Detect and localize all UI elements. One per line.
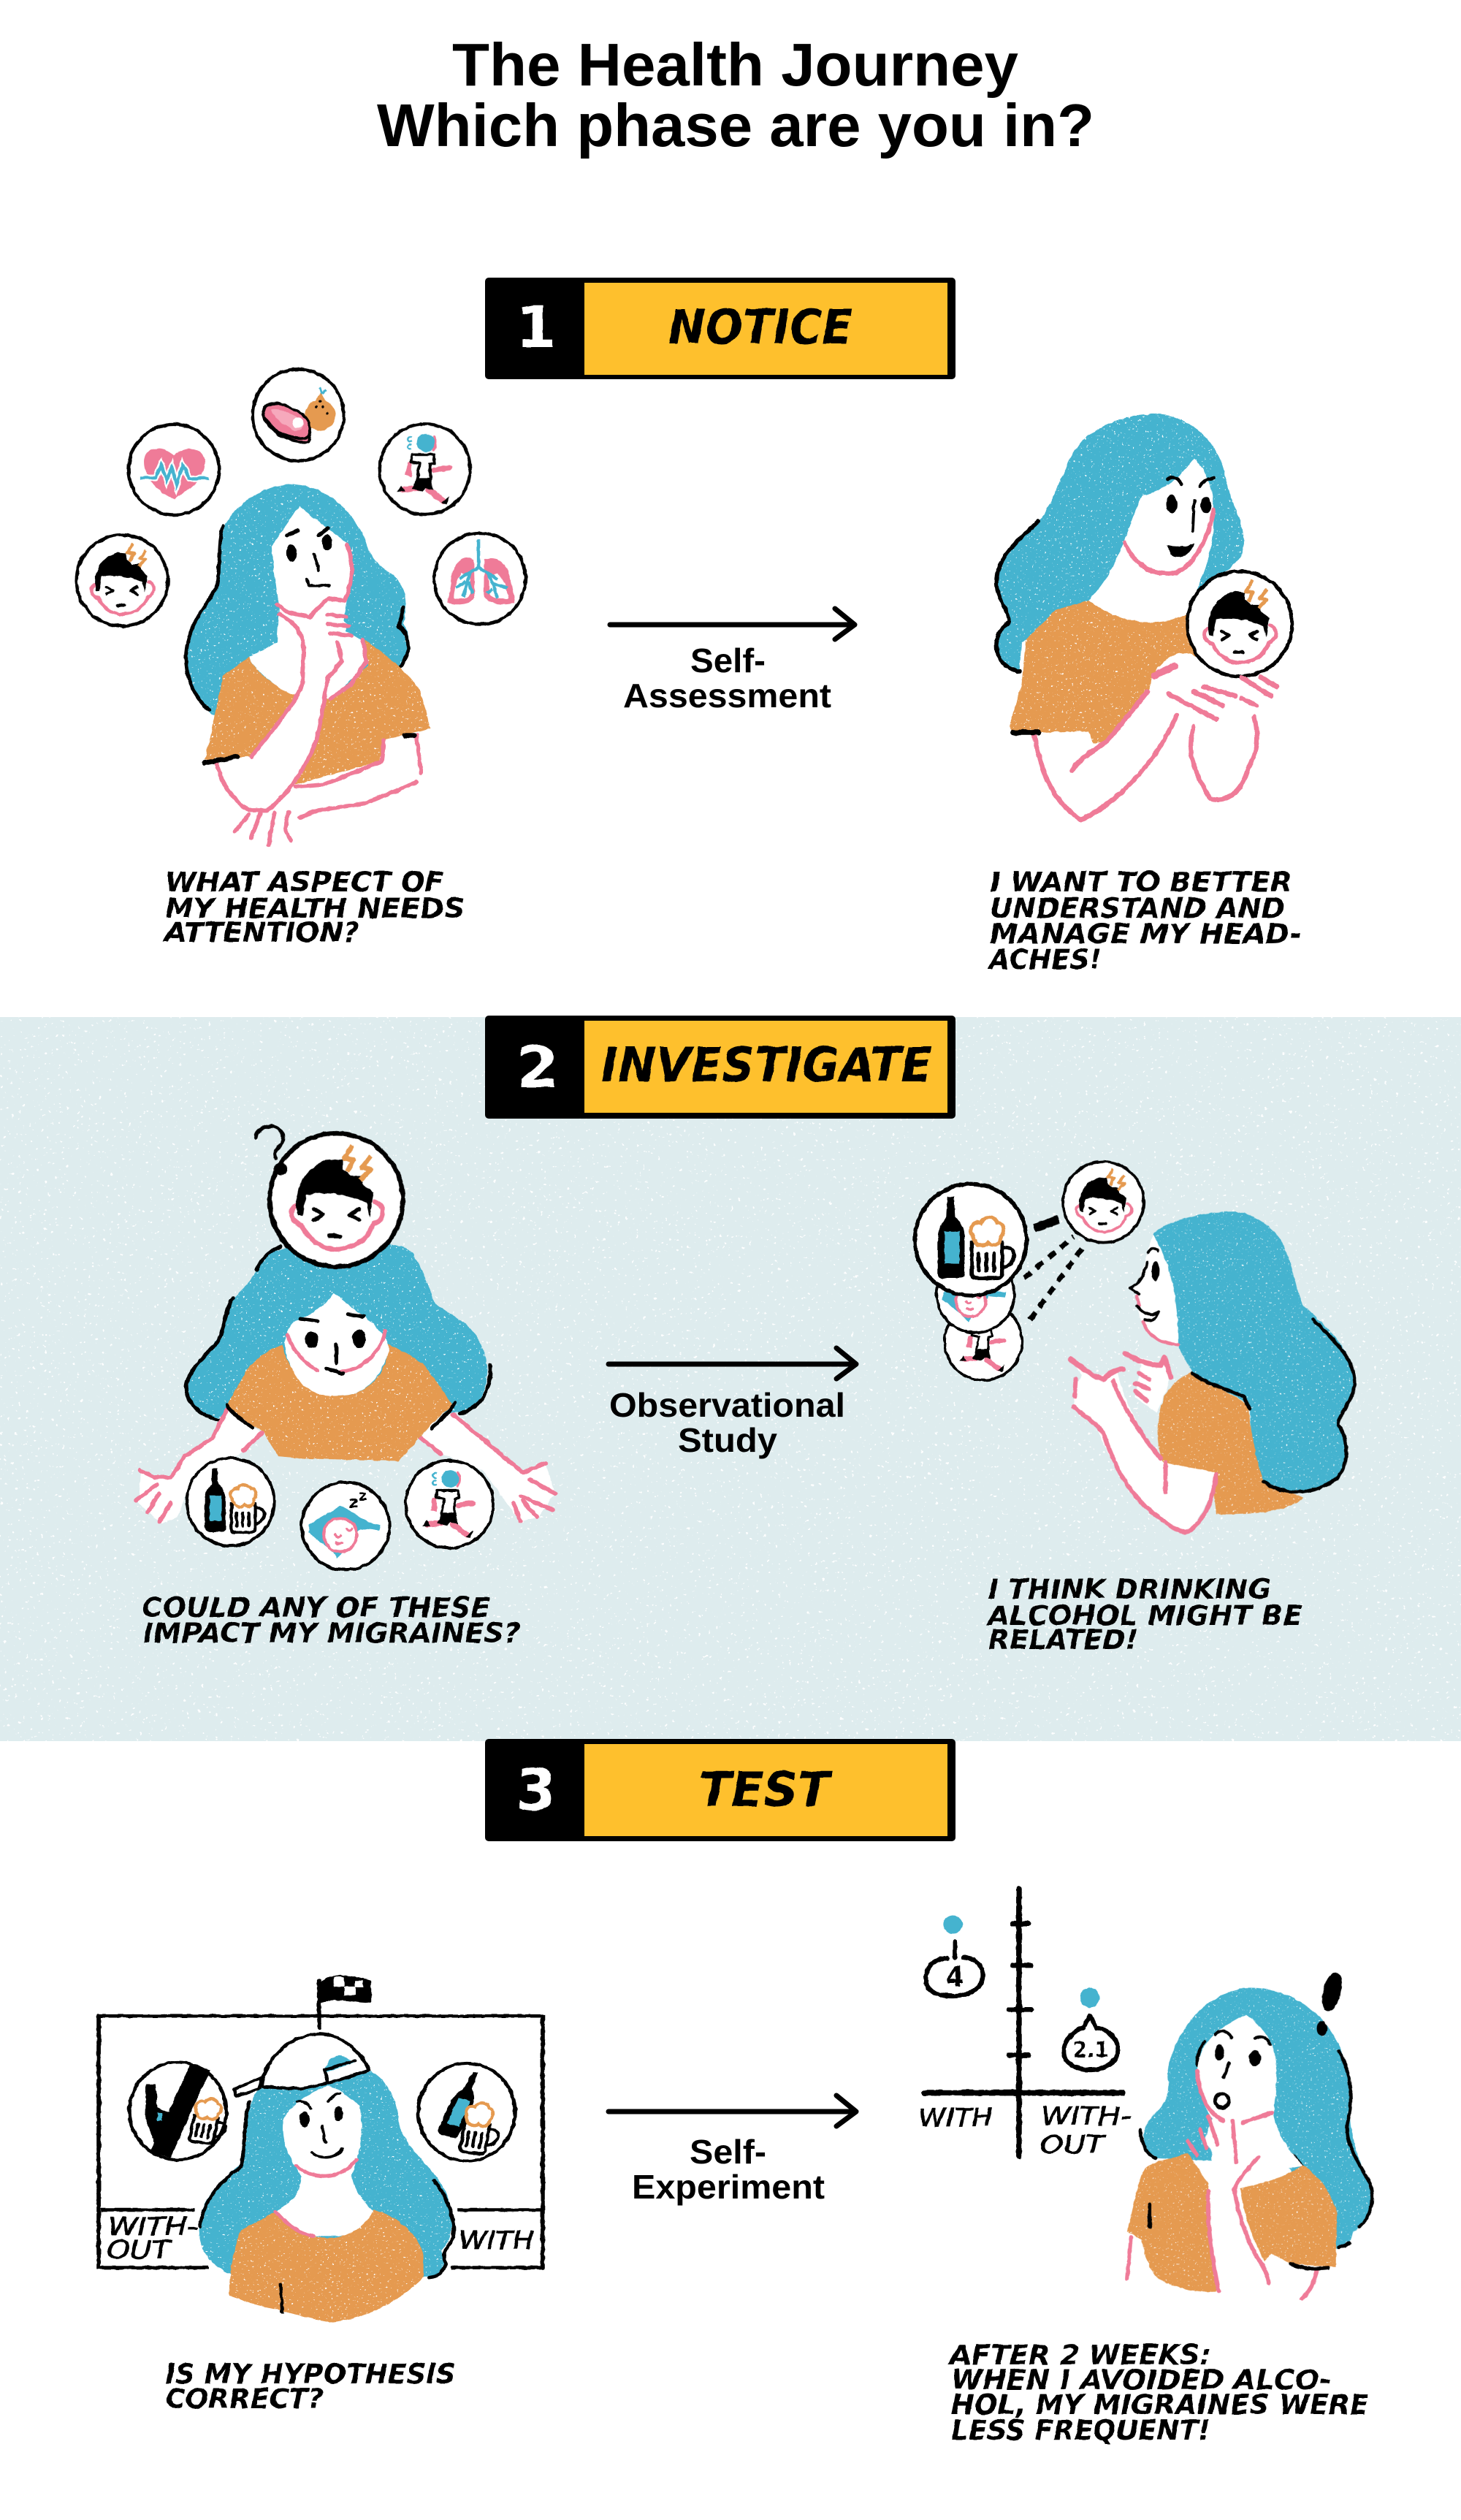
shirt right <box>1240 2165 1337 2267</box>
title: Which phase are you in? <box>377 91 1094 159</box>
caption: could any of these: COULD ANY OF THESE <box>142 1592 490 1623</box>
facial features <box>1130 1249 1178 1344</box>
arrow: self-assessment: Assessment <box>623 677 831 715</box>
caption: after 2 weeks <box>947 2340 1369 2446</box>
pink lines <box>1127 2071 1317 2299</box>
exclamation mark <box>1317 1971 1346 2036</box>
icon: no alcohol <box>129 2062 232 2160</box>
illustration: woman looking at factors <box>136 1126 555 1570</box>
face <box>1131 1235 1178 1344</box>
icon: headache <box>1063 1162 1144 1243</box>
face and neck <box>275 2086 373 2236</box>
arrow: observational study: Study <box>678 1421 777 1459</box>
arrow: self-experiment: Experiment <box>632 2168 825 2206</box>
hand <box>1151 660 1278 722</box>
question mark <box>256 1126 287 1176</box>
flag <box>319 1975 371 2028</box>
title <box>377 31 1094 159</box>
chart axes <box>924 1889 1123 2156</box>
arrow: observational study <box>609 1348 856 1459</box>
hair <box>1144 1987 1373 2249</box>
illustration: woman holding headache icon <box>996 414 1292 820</box>
hair <box>186 484 410 722</box>
arrow: self-assessment: Self- <box>690 642 766 680</box>
icon: meat and pear <box>253 370 344 461</box>
hair <box>199 2071 452 2277</box>
caption: i think drinking: ALCOHOL MIGHT BE <box>985 1600 1302 1632</box>
caption: i want to better understand: MANAGE MY HEAD- <box>990 918 1302 950</box>
board labels: OUT <box>107 2236 172 2265</box>
arrow: self-experiment: Self- <box>690 2133 766 2171</box>
caption: could any of these: IMPACT MY MIGRAINES? <box>143 1618 520 1649</box>
caption: i want to better understand <box>987 867 1302 975</box>
caption: after 2 weeks: LESS FREQUENT! <box>951 2415 1210 2446</box>
caption: i think drinking: I THINK DRINKING <box>988 1574 1271 1605</box>
fingers and arms <box>1034 677 1278 820</box>
caption: i want to better understand: UNDERSTAND AND <box>990 893 1285 924</box>
caption: i think drinking: RELATED! <box>988 1624 1138 1656</box>
facial features <box>1150 2031 1328 2269</box>
arm outlines <box>136 1409 555 1521</box>
icon: with alcohol <box>419 2063 515 2161</box>
heading: 3 test: 3 <box>516 1758 556 1824</box>
icon: sleep <box>937 1255 1014 1333</box>
caption: after 2 weeks: HOL, MY MIGRAINES WERE <box>951 2389 1369 2421</box>
icon: runner <box>945 1303 1022 1380</box>
chart and surprised woman <box>924 1889 1373 2299</box>
chart ticks <box>1009 1924 1031 2055</box>
heading: 2 investigate <box>485 1016 955 1119</box>
icon: runner <box>380 424 470 514</box>
heading: 1 notice <box>485 278 955 379</box>
caption: what aspect <box>163 867 465 948</box>
panel: investigate band <box>0 1017 1461 1741</box>
face and neck <box>1088 458 1214 620</box>
data point: with <box>926 1916 983 1996</box>
icon: headache <box>270 1133 403 1267</box>
caption: what aspect: MY HEALTH NEEDS <box>165 893 465 924</box>
data point: with: 4 <box>946 1961 964 1993</box>
icon: heart <box>129 425 219 515</box>
caption: could any of these <box>142 1592 520 1649</box>
caption: i think drinking <box>985 1574 1302 1656</box>
illustration: woman pointing at correlation <box>915 1162 1355 1533</box>
shirt <box>226 1344 453 1461</box>
caption: what aspect: ATTENTION? <box>163 917 359 948</box>
hair <box>186 1243 487 1419</box>
face and neck <box>1197 2014 1303 2186</box>
caption: is my hypothesis correct <box>165 2359 456 2415</box>
shirt <box>205 640 430 785</box>
hair <box>1153 1211 1355 1491</box>
arrow: observational study: Observational <box>609 1386 845 1424</box>
chart labels <box>918 2102 1132 2160</box>
heading: 3 test <box>485 1739 955 1841</box>
caption: what aspect: WHAT ASPECT OF <box>165 867 444 898</box>
illustration: thinking woman with health icons <box>77 370 525 845</box>
icon: bottle and beer <box>187 1458 275 1546</box>
caption: i want to better understand: ACHES! <box>987 944 1102 975</box>
board labels <box>107 2212 534 2265</box>
heading: 1 notice: 1 <box>516 295 557 361</box>
facial features <box>286 528 332 586</box>
facial features <box>300 1314 366 1374</box>
arm and hands <box>1071 1353 1216 1533</box>
shirt <box>1009 601 1196 743</box>
caption: is my hypothesis correct: CORRECT? <box>165 2383 324 2415</box>
board labels: WITH <box>459 2226 534 2256</box>
caption: after 2 weeks: WHEN I AVOIDED ALCO- <box>951 2364 1332 2396</box>
board labels: WITH- <box>108 2212 198 2242</box>
icon: headache <box>77 535 168 626</box>
forearm <box>216 601 347 812</box>
jaw line <box>1124 510 1213 574</box>
hair <box>997 414 1244 671</box>
icon: headache <box>1187 571 1292 677</box>
heading: 3 test: TEST <box>699 1763 834 1818</box>
chart labels: OUT <box>1040 2131 1106 2160</box>
caption: after 2 weeks: AFTER 2 WEEKS: <box>947 2340 1211 2371</box>
data point: without <box>1064 1988 1118 2070</box>
icon: bottle and beer <box>915 1184 1026 1295</box>
arm left <box>138 1409 262 1524</box>
data point: without: 2.1 <box>1073 2038 1109 2063</box>
links <box>1024 1219 1083 1320</box>
shirt <box>1158 1371 1303 1514</box>
pink lines <box>275 2160 356 2236</box>
heading: 2 investigate: INVESTIGATE <box>601 1038 932 1093</box>
face <box>286 1293 389 1396</box>
facial features <box>1167 478 1213 557</box>
board <box>99 2016 543 2268</box>
shirt left <box>1127 2153 1219 2292</box>
icon: runner <box>405 1461 493 1548</box>
heading: 1 notice: NOTICE <box>668 300 852 355</box>
illustration: woman in cap with experiment board <box>99 1975 543 2323</box>
chart labels: WITH- <box>1041 2102 1132 2131</box>
shirt <box>229 2209 424 2323</box>
caption: is my hypothesis correct: IS MY HYPOTHESIS <box>165 2359 456 2390</box>
arrow: self-experiment <box>609 2095 856 2206</box>
facial features <box>281 2093 343 2312</box>
icon: sleep <box>302 1482 389 1570</box>
pink outlines <box>216 544 421 845</box>
heading: 2 investigate: 2 <box>516 1035 559 1101</box>
arm right <box>420 1412 555 1521</box>
title: The Health Journey <box>452 31 1018 99</box>
arrow: self-assessment <box>610 609 855 715</box>
cap <box>234 2034 369 2096</box>
face and neck <box>249 506 365 698</box>
caption: i want to better understand: I WANT TO BETTER <box>990 867 1292 898</box>
sleeve edges <box>205 736 414 763</box>
chart labels: WITH <box>918 2104 993 2133</box>
icon: lungs <box>434 533 525 624</box>
